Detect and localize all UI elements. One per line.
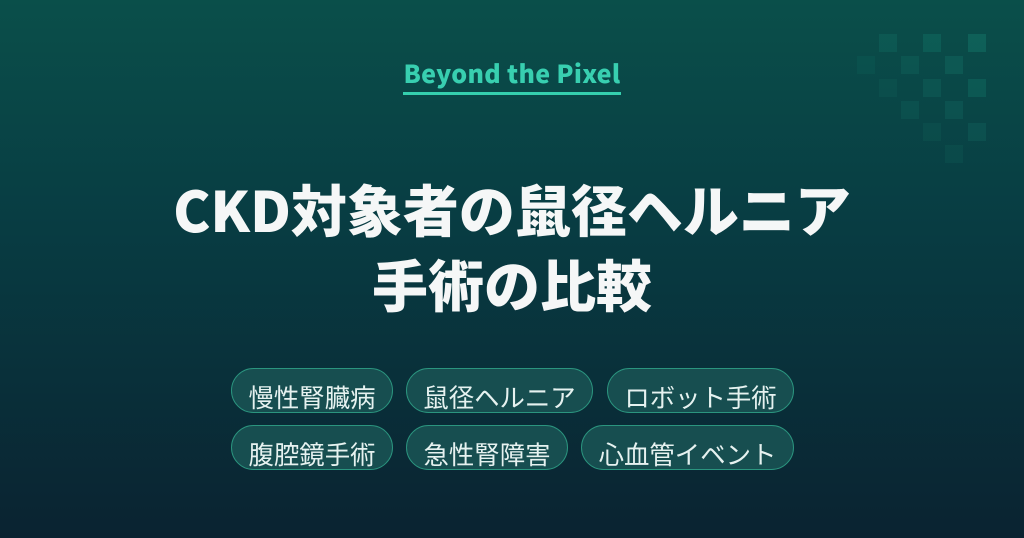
- tag: 急性腎障害: 急性腎障害: [424, 436, 550, 472]
- tag: 鼠径ヘルニア: [406, 368, 593, 413]
- title: [173, 168, 851, 324]
- title: CKD対象者の鼠径ヘルニア: [173, 168, 851, 249]
- tag: ロボット手術: ロボット手術: [624, 379, 777, 415]
- brand label: Beyond the Pixel: Beyond the Pixel: [404, 55, 620, 91]
- tag: ロボット手術: [607, 368, 794, 413]
- tag: 鼠径ヘルニア: 鼠径ヘルニア: [423, 379, 576, 415]
- tag: 腹腔鏡手術: 腹腔鏡手術: [249, 436, 375, 472]
- tag: 心血管イベント: [581, 425, 794, 470]
- title: 手術の比較: [372, 243, 652, 324]
- decorative square grid: [879, 34, 986, 141]
- tag: 腹腔鏡手術: [231, 425, 393, 470]
- tag: 急性腎障害: [406, 425, 568, 470]
- tag: 慢性腎臓病: 慢性腎臓病: [249, 379, 375, 415]
- tag: 慢性腎臓病: [231, 368, 393, 413]
- tag: 心血管イベント: 心血管イベント: [599, 436, 776, 472]
